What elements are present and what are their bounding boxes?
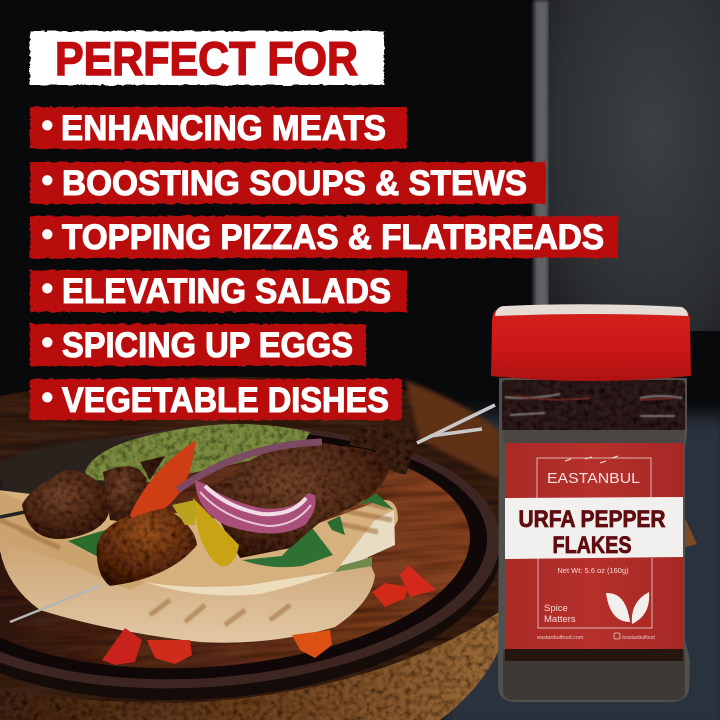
list item: vegetable dishes: VEGETABLE DISHES bbox=[62, 381, 389, 420]
jar body bbox=[498, 378, 690, 702]
list item: elevating salads: ELEVATING SALADS bbox=[62, 272, 391, 311]
spice fill bottom bbox=[503, 646, 685, 700]
list item: spicing up eggs: SPICING UP EGGS bbox=[62, 326, 353, 365]
label bbox=[505, 443, 683, 649]
list item: elevating salads: • bbox=[41, 267, 54, 308]
list item: topping pizzas and flatbreads: TOPPING PIZZAS & FLATBREADS bbox=[62, 218, 604, 257]
website and social: eastanbulfood.com bbox=[537, 635, 584, 641]
list item: boosting soups and stews: BOOSTING SOUPS & STEWS bbox=[62, 164, 527, 203]
cap bbox=[491, 305, 691, 381]
spice jar: FLAKES bbox=[552, 532, 632, 559]
tomatoes bbox=[102, 628, 142, 665]
red onion bbox=[178, 442, 322, 490]
lower flatbread bbox=[0, 530, 375, 643]
spice fill top bbox=[502, 380, 685, 432]
list item: spicing up eggs: • bbox=[41, 321, 54, 362]
logo birds bbox=[565, 456, 618, 463]
meat pieces bbox=[22, 425, 418, 586]
spice jar bbox=[491, 304, 691, 702]
food: kebab on flatbread bbox=[0, 405, 495, 665]
list item: vegetable dishes: • bbox=[41, 376, 54, 417]
spice jar: /eastanbulfood bbox=[622, 635, 655, 641]
plate bbox=[0, 407, 510, 719]
yellow pepper bbox=[193, 498, 239, 567]
list item: boosting soups and stews: • bbox=[41, 159, 54, 200]
list item: enhancing meats: • bbox=[41, 104, 54, 145]
icon: leaves bbox=[606, 592, 649, 624]
tagline: Spice bbox=[544, 603, 568, 614]
white band bbox=[505, 497, 683, 559]
label frame bbox=[537, 458, 652, 628]
upper flatbread bbox=[0, 490, 398, 596]
red pepper bbox=[130, 440, 196, 518]
list item: enhancing meats: ENHANCING MEATS bbox=[61, 109, 386, 148]
plate left inner shadow bbox=[0, 438, 140, 500]
greens bbox=[68, 528, 112, 558]
skewer bbox=[10, 585, 102, 622]
brand name: EASTANBUL bbox=[547, 470, 640, 487]
product name: URFA PEPPER bbox=[518, 506, 666, 533]
list item: topping pizzas and flatbreads: • bbox=[41, 213, 54, 254]
spice jar: Matters bbox=[544, 614, 576, 625]
herb salad bbox=[85, 424, 310, 482]
flatbread grill marks bbox=[0, 498, 392, 625]
wooden table and burlap mat bbox=[0, 377, 697, 720]
net weight: Net Wt: 5.6 oz (160g) bbox=[557, 566, 629, 575]
title banner: PERFECT FOR bbox=[55, 32, 358, 85]
